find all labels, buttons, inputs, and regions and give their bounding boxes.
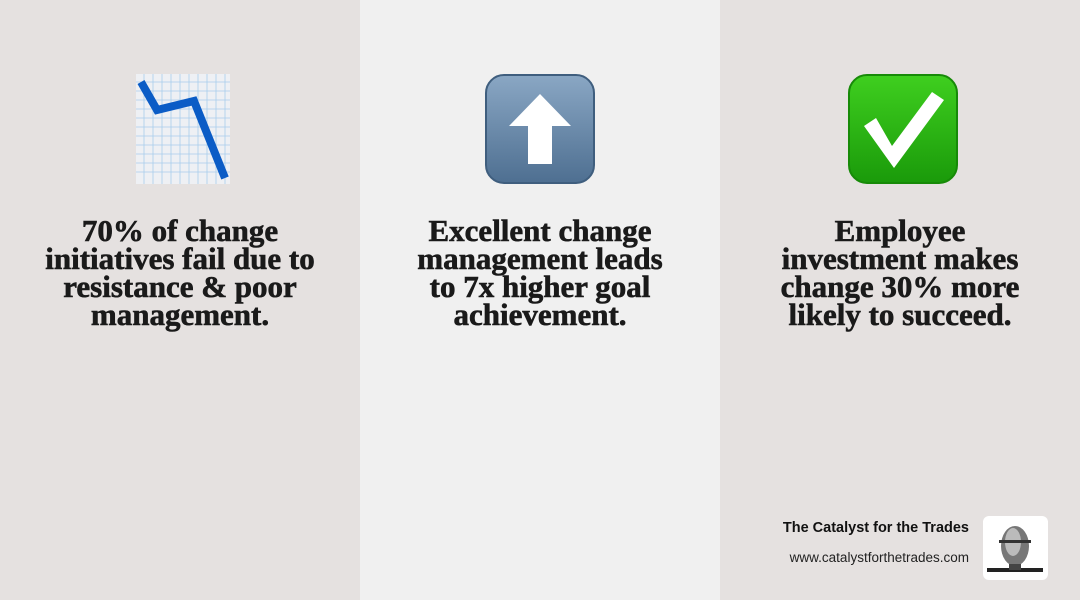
text: stat 2: Excellent change	[428, 213, 652, 248]
text: stat 3: change 30% more	[781, 269, 1019, 304]
text: stat 3: investment makes	[782, 241, 1018, 276]
text: stat 1: 70% of change	[82, 213, 278, 248]
icon: check mark	[848, 74, 958, 184]
text: stat 2: to 7x higher goal	[430, 269, 650, 304]
text: stat 2: management leads	[417, 241, 663, 276]
text: stat 1	[45, 213, 315, 332]
icon: up arrow	[485, 74, 595, 184]
text: stat 3	[781, 213, 1019, 332]
text: brand name: The Catalyst for the Trades	[783, 520, 969, 536]
icon: chart decreasing	[136, 74, 230, 184]
footer: brand	[783, 516, 1048, 580]
text: website: www.catalystforthetrades.com	[790, 550, 969, 565]
text: stat 1: management.	[91, 297, 269, 332]
text: stat 3: likely to succeed.	[788, 297, 1012, 332]
logo: microphone	[983, 516, 1048, 580]
text: stat 2	[417, 213, 663, 332]
panel: stat 3	[720, 0, 1080, 600]
text: stat 2: achievement.	[453, 297, 627, 332]
text: stat 1: initiatives fail due to	[45, 241, 315, 276]
panel: stat 2	[360, 0, 720, 600]
text: stat 3: Employee	[835, 213, 965, 248]
panel: stat 1	[0, 0, 360, 600]
text: stat 1: resistance & poor	[63, 269, 297, 304]
